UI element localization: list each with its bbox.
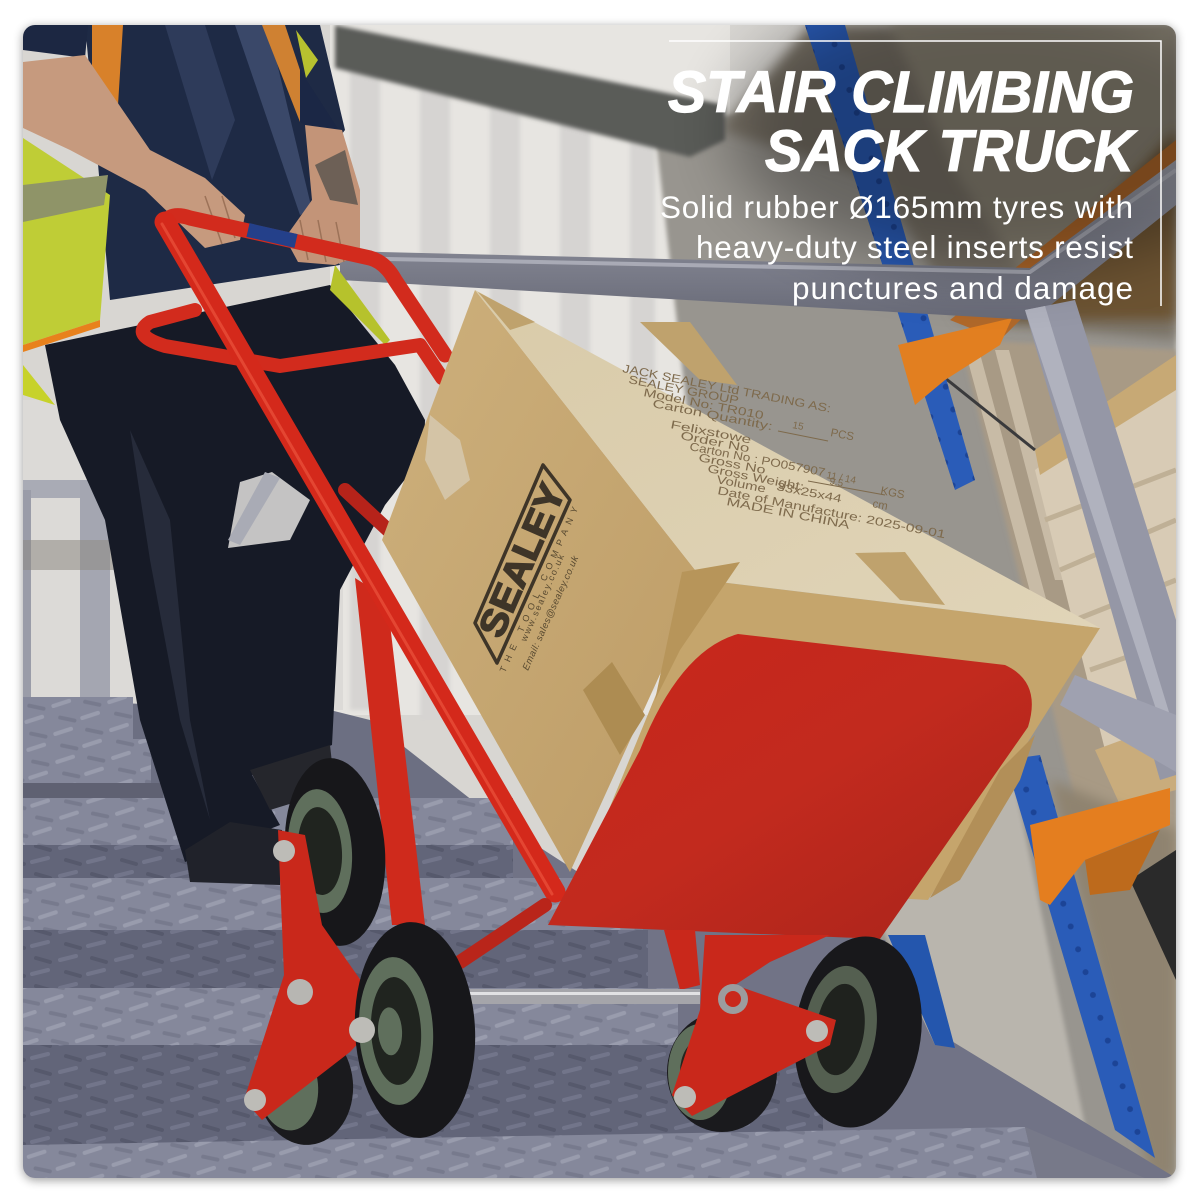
title: STAIR CLIMBING xyxy=(668,60,1134,125)
hi-vis vest xyxy=(23,138,110,345)
sack truck frame xyxy=(143,216,555,962)
box shipping label print: JACK SEALEY Ltd TRADING AS: xyxy=(621,363,832,415)
box shipping label print: Order No xyxy=(679,430,750,455)
box logo: www.sealey.co.uk xyxy=(518,552,566,644)
top shade overlay xyxy=(730,0,1200,270)
arms xyxy=(23,55,245,248)
overhead beam xyxy=(335,25,725,157)
front bolts xyxy=(244,1017,375,1111)
lower left wheel xyxy=(266,1055,354,1145)
box shipping label print: PCS xyxy=(829,427,855,444)
caption text xyxy=(660,189,1133,306)
cardboard box xyxy=(382,290,1100,900)
box shipping label print: KGS xyxy=(879,485,906,502)
hi-vis back panel xyxy=(23,365,55,405)
box logo: THE TOOL COMPANY xyxy=(498,505,580,674)
left bracket xyxy=(246,830,360,1120)
toe plate xyxy=(548,634,1032,939)
box shipping label print: Volume xyxy=(715,474,767,495)
box shipping label print: Date of Manufacture: 2025-09-01 xyxy=(716,485,946,541)
small bolts xyxy=(273,840,295,862)
navy vest and shirt xyxy=(85,25,345,300)
caption frame xyxy=(669,41,1161,306)
right lower wheel xyxy=(667,1012,777,1132)
title xyxy=(668,60,1138,184)
handrail and post xyxy=(340,160,1176,780)
box shipping label print: SEALEY GROUP xyxy=(627,374,740,407)
orange rack beams xyxy=(898,318,1170,905)
stair flight xyxy=(23,697,1176,1178)
box shipping label print: 33x25x44 xyxy=(775,481,843,506)
box logo: SEALEY xyxy=(471,477,573,643)
right bracket xyxy=(672,935,836,1116)
left hub bolt xyxy=(287,979,313,1005)
blue racking upright xyxy=(805,25,1155,1158)
gap between legs xyxy=(228,472,310,548)
box shipping label print: 11 / 14 xyxy=(825,470,857,487)
centre leg and axle xyxy=(664,930,700,990)
worker xyxy=(23,25,425,885)
box shipping label print xyxy=(621,363,946,541)
front big wheel xyxy=(354,922,476,1138)
box shipping label print: Felixstowe xyxy=(669,419,752,447)
box shipping label print: Carton No : PO057907 xyxy=(688,441,826,479)
lower blue upright xyxy=(888,935,955,1048)
box logo: Email: sales@sealey.co.uk xyxy=(521,553,582,672)
right big wheel xyxy=(796,936,922,1128)
sleeve xyxy=(23,25,88,58)
box shipping label print: Gross Weight: xyxy=(706,463,805,494)
shoes xyxy=(185,822,282,885)
box shipping label print: Model No: TR010 xyxy=(642,387,764,422)
trousers xyxy=(45,285,425,862)
title: SACK TRUCK xyxy=(765,119,1138,184)
right bolts xyxy=(674,984,828,1108)
box logo xyxy=(471,465,582,674)
box shipping label print: MADE IN CHINA xyxy=(725,496,851,532)
box shipping label print: 15 xyxy=(791,420,805,433)
wheels and brackets xyxy=(244,755,934,1149)
caption text: heavy-duty steel inserts resist xyxy=(696,229,1133,265)
box shipping label print: 9.5 xyxy=(828,476,845,490)
caption text: Solid rubber Ø165mm tyres with xyxy=(660,189,1133,225)
box shipping label print: Carton Quantity: xyxy=(651,398,773,433)
caption text: punctures and damage xyxy=(792,270,1133,306)
box shipping label print: Gross No xyxy=(697,452,766,477)
box shipping label print: cm xyxy=(871,498,889,513)
upper back wheel xyxy=(285,758,386,946)
